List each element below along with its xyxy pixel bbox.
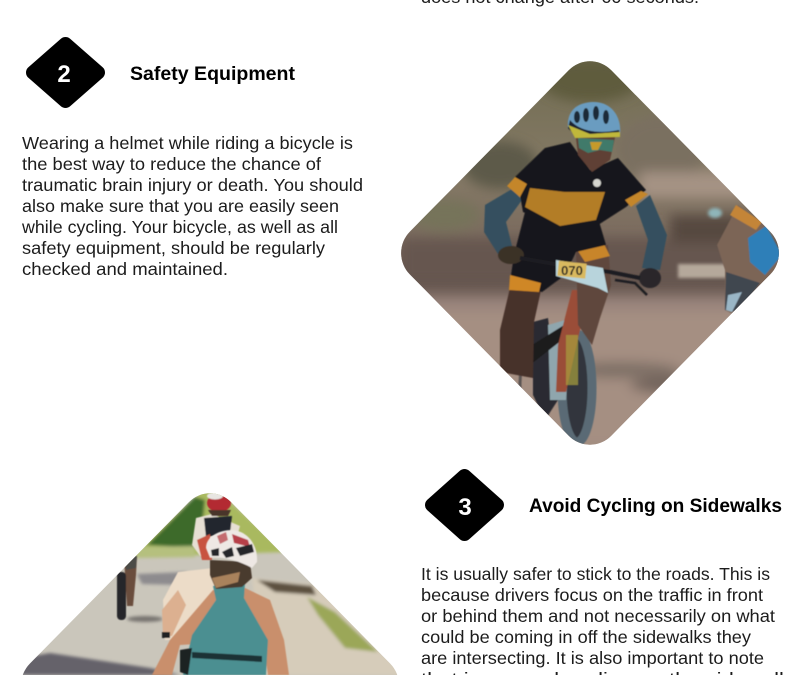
helmet bbox=[568, 102, 620, 136]
text block: sidewalks body: could be coming in off the sidewalks they bbox=[421, 627, 751, 647]
text block: safety equipment body bbox=[21, 133, 363, 279]
bike: rear frame and wheels bbox=[518, 375, 550, 416]
sub-element: green roadside background bbox=[10, 488, 410, 675]
helmet bbox=[206, 530, 257, 568]
text block: safety equipment body: traumatic brain injury or death. You should bbox=[22, 175, 363, 195]
text block: safety equipment body: the best way to reduce the chance of bbox=[22, 154, 321, 174]
sub-element: second rider at right edge bbox=[717, 205, 785, 315]
section 2: safety equipment bbox=[21, 44, 363, 279]
sub-element: distant cyclists bbox=[117, 492, 240, 640]
number plate bbox=[556, 260, 608, 293]
arms bbox=[484, 189, 522, 254]
text block: safety equipment body: also make sure that you are easily seen bbox=[22, 196, 339, 216]
text block: sidewalks body: or behind them and not necessarily on what bbox=[421, 606, 775, 626]
sub-element: main cyclist in teal top bbox=[152, 530, 289, 675]
photo: mountain biker in diamond frame bbox=[395, 55, 800, 450]
jersey bbox=[515, 142, 646, 226]
text block: safety equipment body: Wearing a helmet while riding a bicycle is bbox=[22, 133, 353, 153]
icon: number 2 diamond badge: 2 bbox=[57, 61, 71, 88]
section 3: avoid cycling on sidewalks bbox=[421, 476, 790, 675]
text block: sidewalks body: are intersecting. It is also important to note bbox=[421, 648, 764, 668]
glasses bbox=[578, 138, 614, 153]
text block: sidewalks body: because drivers focus on the traffic in front bbox=[421, 585, 763, 605]
neck and face bbox=[576, 136, 616, 172]
text block: sidewalks body bbox=[421, 564, 790, 675]
sub-element: main cyclist bbox=[484, 102, 667, 442]
handlebar bbox=[520, 258, 640, 278]
icon: number 3 diamond badge bbox=[432, 476, 497, 534]
photo: cyclists on a road in diamond frame bbox=[22, 493, 398, 675]
sub-element: main cyclist: 070 bbox=[561, 263, 583, 278]
text block: safety equipment body: safety equipment, should be regularly bbox=[22, 238, 325, 258]
hands bbox=[498, 246, 524, 264]
shorts bbox=[510, 212, 606, 292]
text block: safety equipment body: checked and maintained. bbox=[22, 259, 228, 279]
heading: safety equipment: Safety Equipment bbox=[130, 64, 296, 85]
text block: safety equipment body: while cycling. Your bicycle, as well as all bbox=[21, 217, 338, 237]
icon: number 2 diamond badge bbox=[33, 44, 98, 101]
legs bbox=[500, 288, 541, 378]
heading: avoid cycling on sidewalks: Avoid Cycling on Sidewalks bbox=[529, 496, 782, 517]
text block: sidewalks body: It is usually safer to stick to the roads. This is bbox=[421, 564, 770, 584]
icon: number 3 diamond badge: 3 bbox=[458, 494, 472, 521]
